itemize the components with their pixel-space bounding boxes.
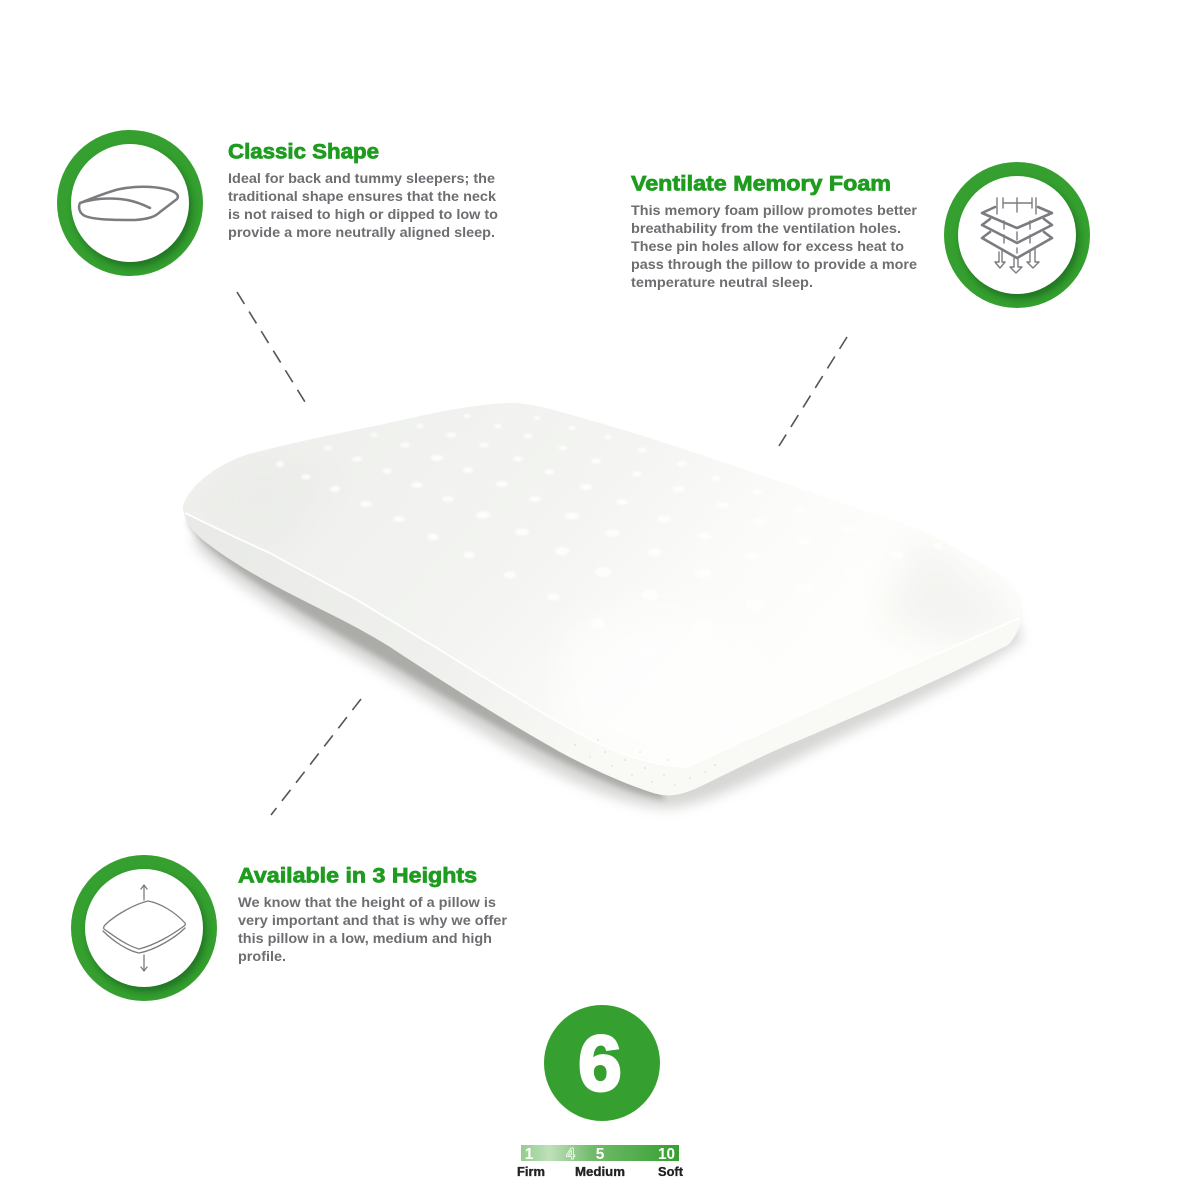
scale labels: Firm: [517, 1165, 545, 1179]
firmness rating: [517, 1005, 684, 1179]
panel: ventilate memory foam: [631, 162, 1090, 308]
text: ventilate memory foam description: This memory foam pillow promotes better: [631, 203, 918, 218]
text: available in 3 heights description: very important and that is why we offer: [238, 913, 508, 928]
heading: available in 3 heights: Available in 3 Heights: [238, 864, 477, 888]
text: classic shape description: [228, 171, 498, 240]
text: available in 3 heights description: profile.: [238, 949, 286, 964]
panel: available in 3 heights: [71, 855, 508, 1001]
text: classic shape description: traditional shape ensures that the neck: [228, 189, 497, 204]
panel: classic shape: [57, 130, 498, 276]
icon: ventilation layers badge: [944, 162, 1090, 308]
text: classic shape description: provide a more neutrally aligned sleep.: [228, 225, 495, 240]
text: ventilate memory foam description: pass through the pillow to provide a more: [631, 257, 918, 272]
rating badge: 6: [544, 1005, 660, 1121]
rating badge: 6: 6: [578, 1019, 622, 1107]
text: ventilate memory foam description: [631, 203, 918, 290]
icon: pillow height badge: [71, 855, 217, 1001]
firmness scale bar: 5: [596, 1146, 605, 1163]
text: ventilate memory foam description: breathability from the ventilation holes.: [631, 221, 901, 236]
pillow image: [183, 403, 1030, 808]
heading: ventilate memory foam: Ventilate Memory Foam: [631, 172, 891, 196]
leader line: ventilate memory foam: [779, 337, 847, 446]
text: ventilate memory foam description: temperature neutral sleep.: [631, 275, 813, 290]
leader line: available heights: [271, 699, 361, 815]
text: classic shape description: Ideal for back and tummy sleepers; the: [228, 171, 496, 186]
text: classic shape description: is not raised to high or dipped to low to: [228, 207, 498, 222]
firmness scale bar: 10: [658, 1146, 675, 1163]
firmness scale bar: 1: [525, 1146, 534, 1163]
firmness scale bar: [521, 1145, 679, 1163]
heading: classic shape: Classic Shape: [228, 140, 379, 164]
text: ventilate memory foam description: These pin holes allow for excess heat to: [631, 239, 904, 254]
firmness scale bar: 4: [566, 1146, 575, 1163]
pillow seam: [185, 513, 1020, 767]
scale labels: Medium: [575, 1165, 625, 1179]
foam speckles: [574, 739, 716, 786]
text: available in 3 heights description: We know that the height of a pillow is: [238, 895, 496, 910]
ventilation holes: [276, 414, 943, 657]
leader line: classic shape: [237, 292, 305, 402]
icon: classic pillow badge: [57, 130, 203, 276]
scale labels: [517, 1165, 684, 1179]
text: available in 3 heights description: this pillow in a low, medium and high: [238, 931, 492, 946]
scale labels: Soft: [658, 1165, 684, 1179]
text: available in 3 heights description: [238, 895, 508, 964]
pillow top surface: [578, 646, 610, 712]
